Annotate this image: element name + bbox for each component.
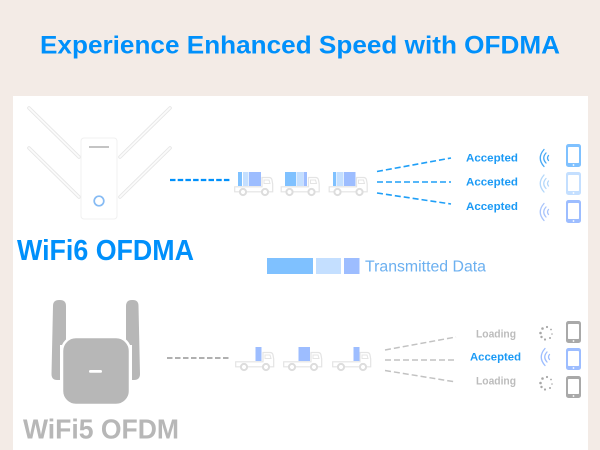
heading: WiFi6 OFDMA: WiFi6 OFDMA bbox=[17, 235, 194, 267]
label: Accepted 2: Accepted bbox=[466, 176, 518, 188]
legend: transmitted data bbox=[267, 258, 486, 276]
arrow: dashed signal from WiFi5 router bbox=[167, 357, 230, 359]
icon: signal waves 1 bbox=[540, 150, 548, 166]
legend: transmitted data: Transmitted Data bbox=[365, 258, 486, 276]
arrows: three dashed signals to WiFi6 devices bbox=[377, 158, 451, 204]
icon: loading spinner 1 bbox=[539, 326, 553, 341]
arrows: three dashed signals to WiFi5 devices bbox=[385, 337, 456, 382]
truck: WiFi5 truck 2 with one data block bbox=[284, 347, 322, 370]
panel: white content area bbox=[13, 96, 588, 450]
icon: phone gray 2 bbox=[566, 376, 581, 398]
icon: WiFi6 router with four antennas bbox=[29, 108, 170, 219]
label: Loading 2: Loading bbox=[476, 376, 516, 388]
truck: WiFi5 truck 1 with one data block bbox=[236, 347, 274, 370]
truck: WiFi6 truck 2 with mixed data bbox=[281, 172, 319, 195]
icon: signal waves 3 bbox=[540, 204, 548, 220]
icon: WiFi5 router with two antennas bbox=[52, 300, 140, 405]
label: Loading 1: Loading bbox=[476, 328, 516, 340]
icon: phone gray 1 bbox=[566, 321, 581, 343]
label: Accepted 3: Accepted bbox=[466, 201, 518, 213]
heading: WiFi5 OFDM: WiFi5 OFDM bbox=[23, 414, 179, 444]
icon: loading spinner 2 bbox=[539, 376, 553, 391]
truck: WiFi6 truck 3 with mixed data bbox=[329, 172, 367, 195]
icon: phone blue WiFi5 bbox=[566, 348, 581, 370]
title: Experience Enhanced Speed with OFDMA bbox=[40, 32, 560, 60]
label: Accepted 1: Accepted bbox=[466, 152, 518, 164]
arrow: dashed signal from WiFi6 router bbox=[170, 179, 231, 181]
truck: WiFi5 truck 3 with one data block bbox=[333, 347, 371, 370]
icon: signal waves 2 bbox=[540, 175, 548, 192]
label: Accepted WiFi5: Accepted bbox=[470, 352, 521, 364]
icon: signal waves WiFi5 bbox=[541, 348, 550, 366]
icon: phone blue bbox=[566, 144, 581, 167]
icon: phone periwinkle bbox=[566, 200, 581, 223]
icon: phone light blue bbox=[566, 172, 581, 195]
truck: WiFi6 truck 1 with mixed data bbox=[235, 172, 273, 195]
